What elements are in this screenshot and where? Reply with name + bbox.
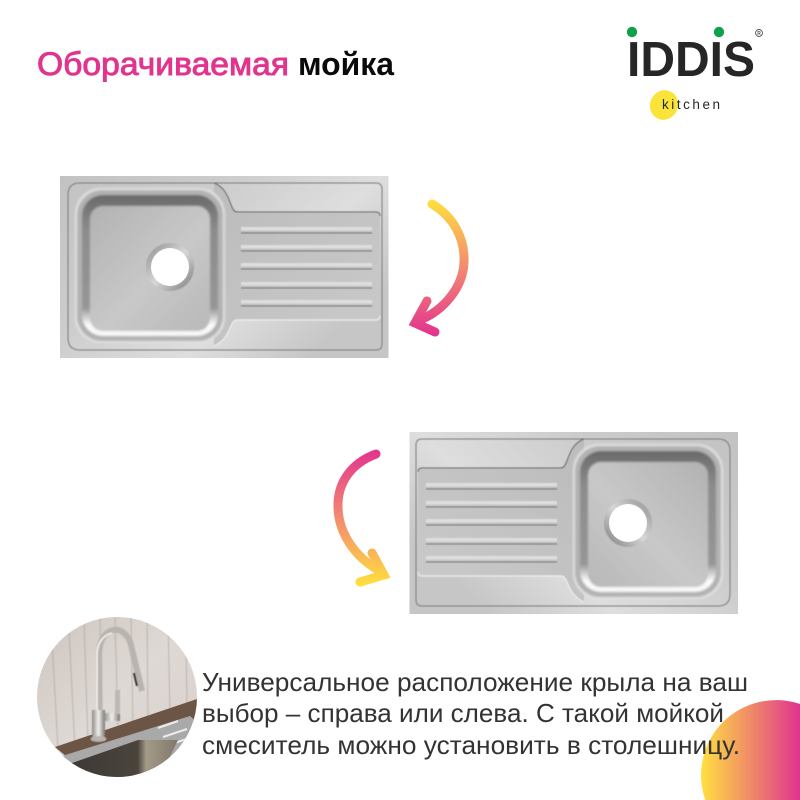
circular photo: faucet over kitchen sink (37, 617, 197, 777)
faucet (90, 630, 142, 742)
logo wordmark: IDDIS (627, 33, 755, 87)
decorative gradient circle, bottom right (701, 700, 800, 800)
line 3: смеситель можно установить в столешницу. (202, 730, 740, 760)
sink basin (72, 740, 178, 777)
logo kitchen text: kitchen (662, 97, 720, 112)
logo yellow blob (645, 85, 683, 125)
top sink, bowl on the left (60, 176, 388, 358)
line 2: выбор – справа или слева. С такой мойкой (202, 698, 724, 728)
arrow: curved, yellow to pink, pointing to the sink (415, 204, 464, 332)
line 1: Универсальное расположение крыла на ваш (202, 667, 748, 697)
logo: IDDIS kitchen (627, 27, 762, 125)
arrow: curved, pink to yellow, pointing to the sink (338, 454, 384, 582)
countertop (55, 699, 197, 757)
title (37, 46, 394, 82)
title pink part: Оборачиваемая (37, 46, 289, 82)
title black part: мойка (298, 46, 394, 82)
description text (202, 667, 748, 760)
bottom sink, bowl on the right (mirrored) (410, 432, 738, 614)
logo registered mark: R (757, 31, 761, 37)
logo green dots (627, 27, 724, 37)
sink rim (62, 716, 197, 777)
